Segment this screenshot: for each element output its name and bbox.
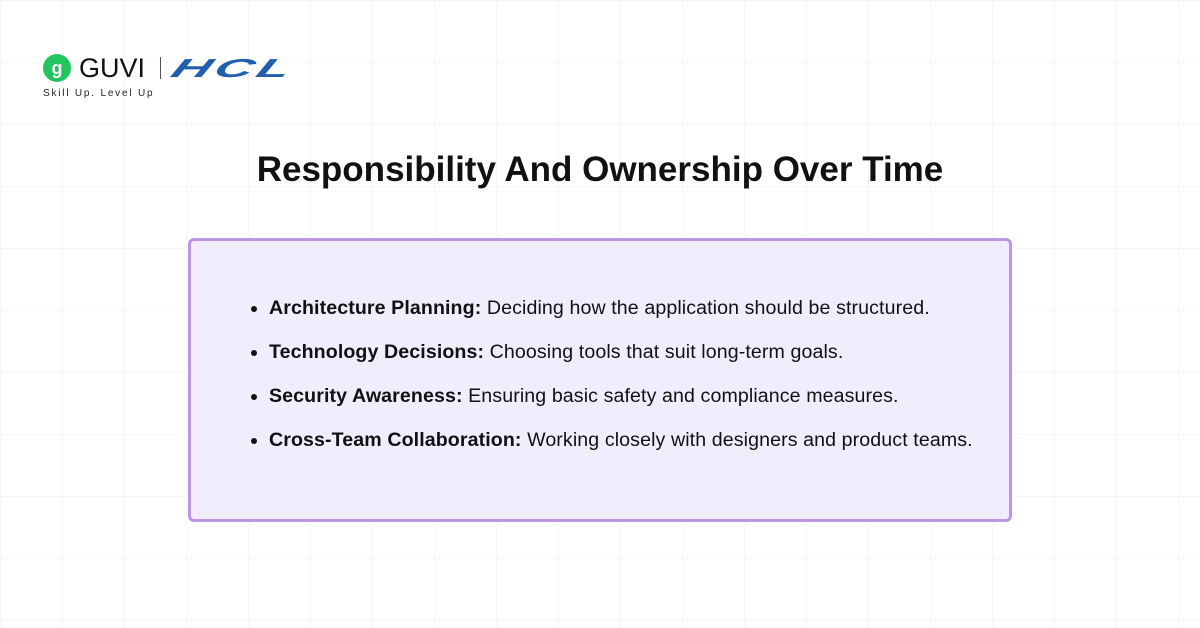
bullet list: Technology Decisions: Choosing tools that suit long-term goals. <box>269 341 843 363</box>
bullet list: Architecture Planning: Deciding how the application should be structured. <box>269 297 930 319</box>
guvi wordmark: GUVI <box>79 53 145 83</box>
icon: guvi circle: g <box>52 58 62 78</box>
logo <box>43 53 301 99</box>
tagline: Skill Up. Level Up <box>43 88 154 99</box>
bullet list <box>251 297 973 451</box>
panel: list <box>188 238 1012 522</box>
divider <box>160 57 161 79</box>
icon: guvi circle <box>43 54 71 82</box>
bullet list: Security Awareness: Ensuring basic safety and compliance measures. <box>269 385 899 407</box>
hcl wordmark: HCL <box>166 53 301 83</box>
bullet list: Cross-Team Collaboration: Working closely with designers and product teams. <box>269 429 973 451</box>
title: Responsibility And Ownership Over Time <box>257 150 943 189</box>
